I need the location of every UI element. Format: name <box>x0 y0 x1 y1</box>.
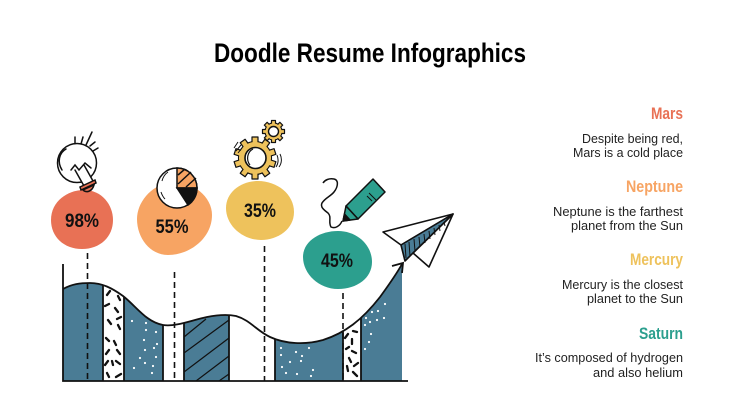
blob: 35% <box>226 181 294 240</box>
icon: pencil <box>321 179 385 228</box>
legend: Saturn: Saturn <box>639 324 683 343</box>
legend: Mars: Despite being red, <box>582 132 683 146</box>
legend: Saturn: and also helium <box>593 366 683 380</box>
curve line <box>63 264 402 343</box>
blob: 98% <box>51 190 113 249</box>
dash pattern bands <box>105 291 358 377</box>
big gear <box>234 137 276 179</box>
icon: paper plane <box>383 214 453 267</box>
chart bands <box>63 260 402 381</box>
blob: 55%: 55% <box>156 217 189 238</box>
legend: Neptune <box>553 177 684 233</box>
legend: Mercury <box>562 250 684 306</box>
small gear <box>262 120 284 142</box>
legend: Mars: Mars <box>651 104 683 123</box>
legend: Mars: Mars is a cold place <box>573 146 683 160</box>
legend: Saturn <box>535 324 683 380</box>
blob: 35%: 35% <box>244 201 276 222</box>
legend: Neptune: planet from the Sun <box>571 219 683 233</box>
legend: Mercury: planet to the Sun <box>587 292 683 306</box>
icon: light bulb <box>58 132 98 192</box>
legend: Neptune: Neptune is the farthest <box>553 205 684 219</box>
icon: pie chart <box>157 168 197 208</box>
legend: Mars <box>573 104 683 160</box>
legend: Mercury: Mercury is the closest <box>562 278 684 292</box>
blob: 45%: 45% <box>321 251 353 272</box>
arrow head <box>392 263 403 273</box>
area chart <box>63 260 408 381</box>
legend: Mercury: Mercury <box>630 250 683 269</box>
blob: 55% <box>137 182 212 255</box>
legend: Saturn: It’s composed of hydrogen <box>535 351 683 365</box>
axes <box>63 264 408 381</box>
icon: gears <box>234 120 284 179</box>
blob: 45% <box>303 231 372 289</box>
pencil scribble <box>321 179 342 228</box>
legend: Neptune: Neptune <box>626 177 683 196</box>
dashed guide lines <box>88 246 343 381</box>
blob: 98%: 98% <box>65 211 99 232</box>
dot pattern bands <box>131 303 386 377</box>
title: Doodle Resume Infographics <box>214 38 526 68</box>
